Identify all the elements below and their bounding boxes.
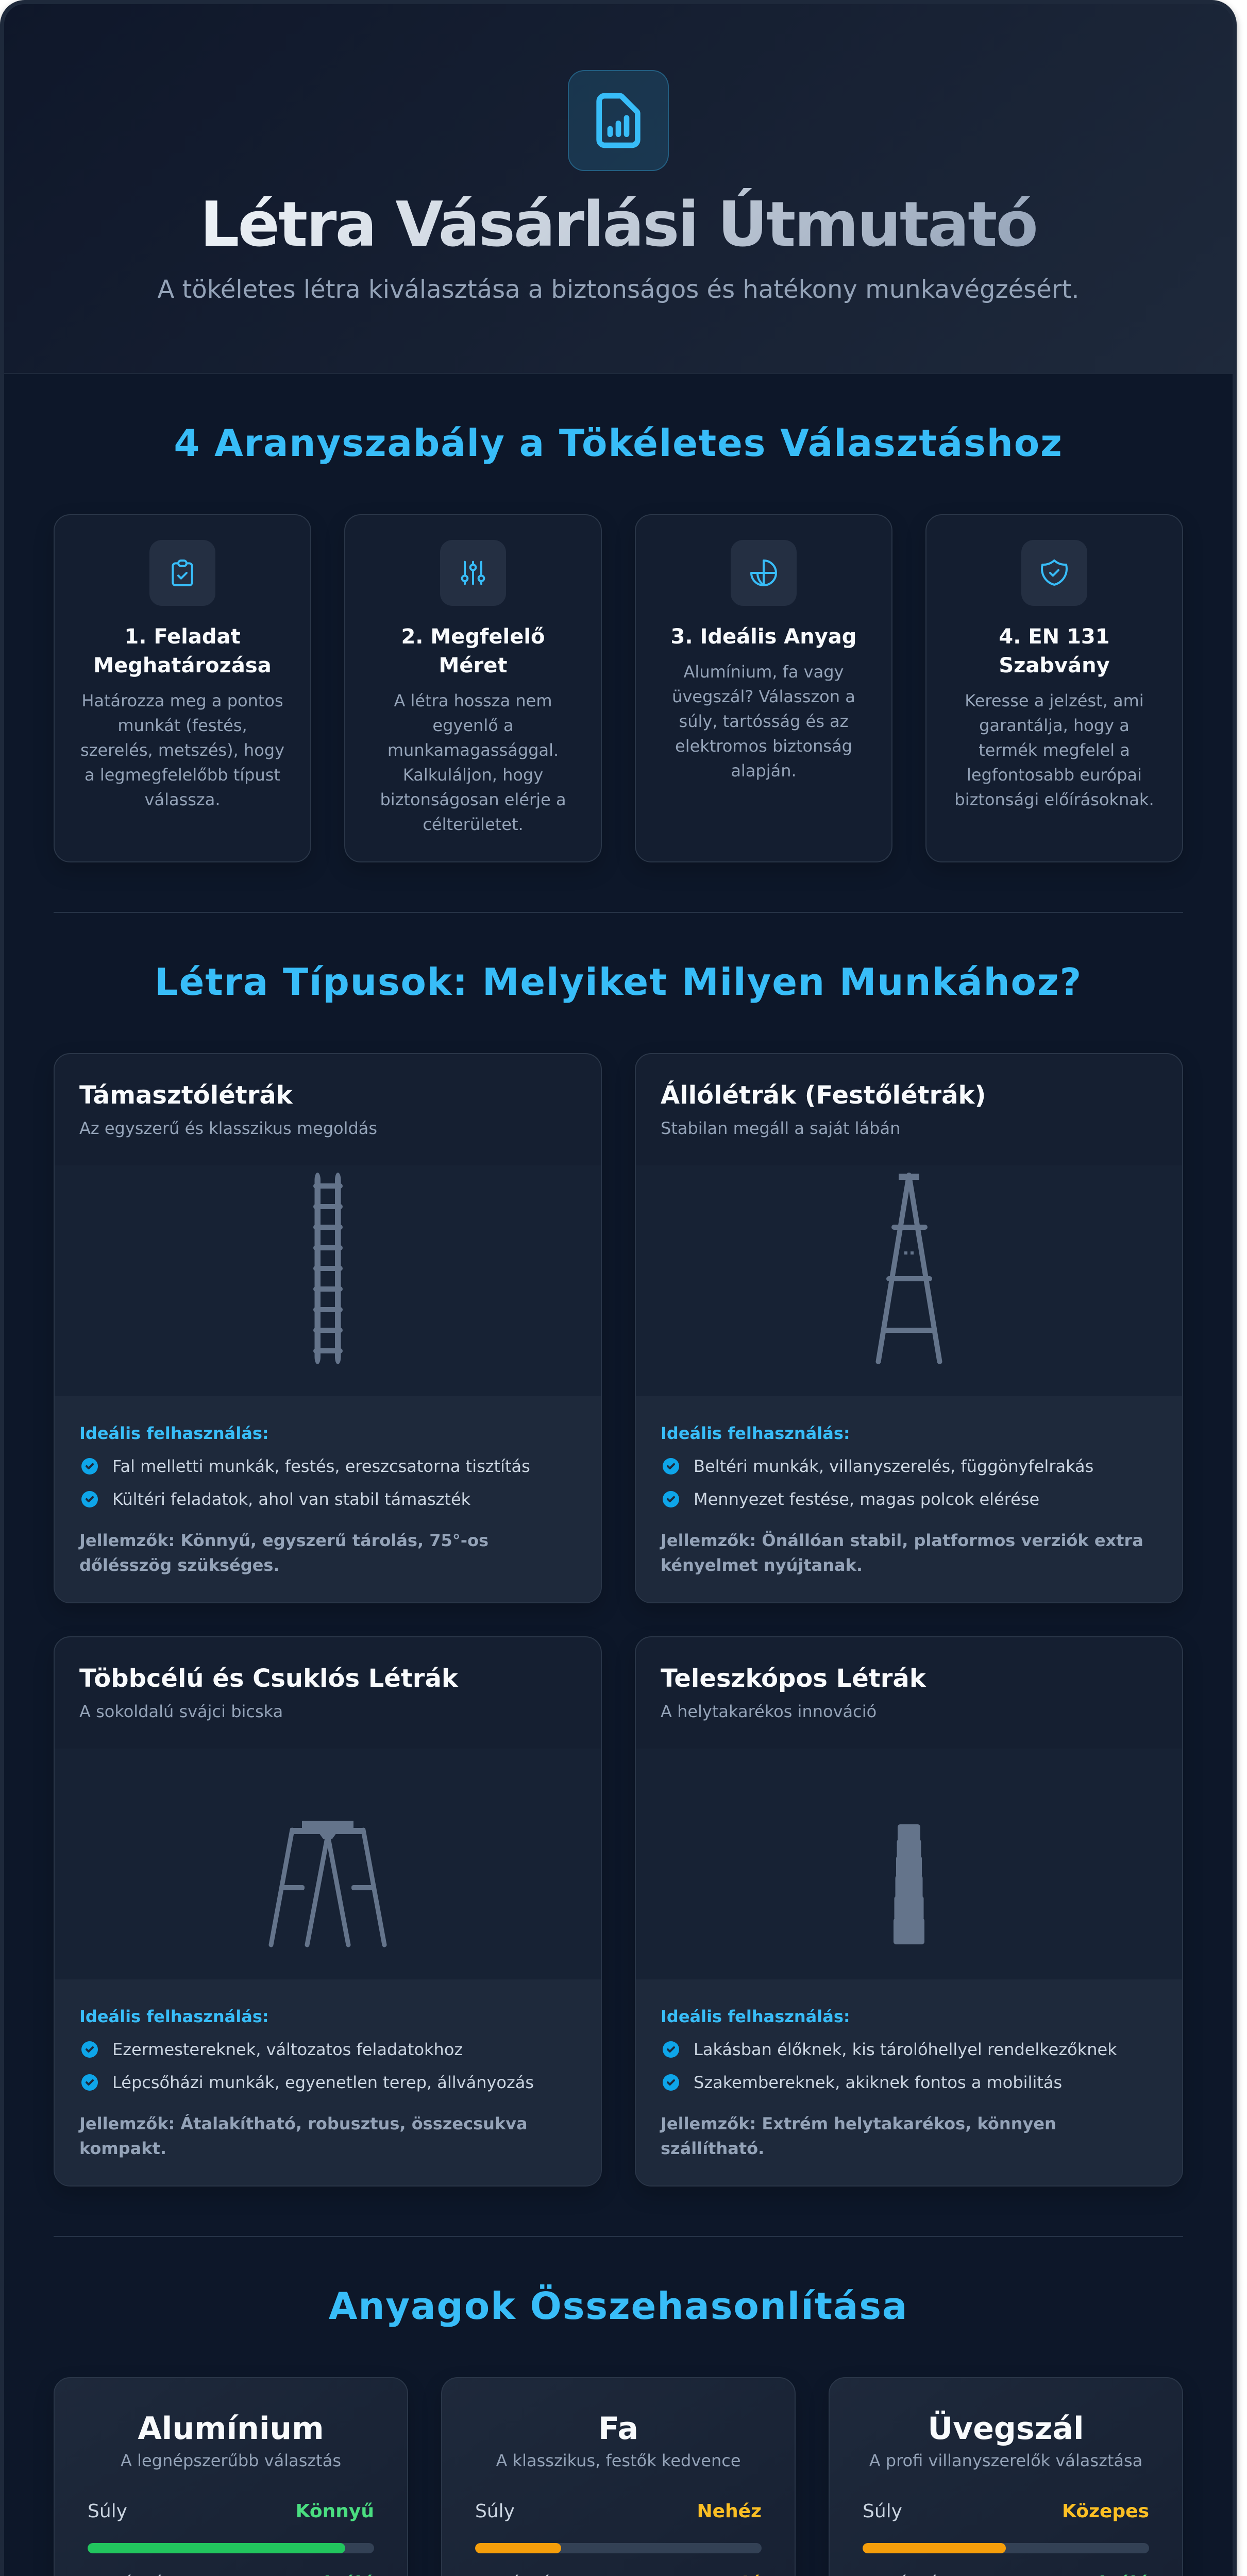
panel: telescopic ladders <box>635 1636 1183 2187</box>
multipurpose heading: Többcélú és Csuklós Létrák <box>79 1664 458 1693</box>
fiberglass subtitle: A profi villanyszerelők választása <box>869 2451 1142 2470</box>
heading: golden rules: 4 Aranyszabály a Tökéletes Választáshoz <box>174 421 1063 465</box>
bar: durability <box>863 2570 1149 2576</box>
telescopic heading <box>661 1664 926 1721</box>
bar: durability <box>88 2570 374 2576</box>
leaning ladder details: Ideális felhasználás: <box>79 1423 269 1443</box>
icon: document chart <box>568 70 669 171</box>
use case: Lépcsőházi munkák, egyenetlen terep, állványozás <box>112 2073 534 2092</box>
icon: sliders <box>440 540 506 606</box>
use case: Ezermestereknek, változatos feladatokhoz <box>112 2040 463 2059</box>
bar: weight <box>863 2498 1149 2570</box>
rule 1 text: a legmegfelelőbb típust <box>85 765 280 785</box>
rule 3 heading: 3. Ideális Anyag <box>671 625 856 649</box>
characteristics <box>660 1531 1143 1575</box>
step ladder details: Ideális felhasználás: <box>661 1423 850 1443</box>
title: Létra Vásárlási Útmutató <box>200 189 1037 261</box>
leaning ladder heading: Támasztólétrák <box>79 1081 293 1110</box>
fiberglass title: Üvegszál <box>928 2411 1084 2447</box>
telescopic heading: Teleszkópos Létrák <box>661 1664 926 1693</box>
characteristics: Jellemzők: Könnyű, egyszerű tárolás, 75°-os <box>79 1531 488 1550</box>
rule 4 text: termék megfelel a <box>979 740 1130 760</box>
characteristics: Jellemzők: Extrém helytakarékos, könnyen <box>661 2114 1056 2133</box>
wood subtitle: A klasszikus, festők kedvence <box>496 2451 741 2470</box>
characteristics: kényelmet nyújtanak. <box>661 1555 863 1575</box>
panel: step ladders <box>635 1053 1183 1603</box>
characteristics: dőlésszög szükséges. <box>79 1555 280 1575</box>
telescopic details <box>636 1979 1182 2187</box>
panel: wood <box>441 2377 796 2576</box>
rule 3 text: üvegszál? Válasszon a <box>672 687 855 706</box>
rule 2 text: biztonságosan elérje a <box>380 790 566 809</box>
bar: weight: Nehéz <box>697 2501 762 2522</box>
header <box>4 4 1233 374</box>
panel: rule 3 <box>635 514 892 862</box>
panel: multipurpose ladders <box>54 1636 602 2187</box>
illustration: A-frame ladder <box>636 1165 1182 1396</box>
panel: rule 1 <box>54 514 311 862</box>
bar: durability <box>475 2570 762 2576</box>
use case: Lakásban élőknek, kis tárolóhellyel rendelkezőknek <box>694 2040 1117 2059</box>
use case: Beltéri munkák, villanyszerelés, függönyfelrakás <box>694 1456 1093 1476</box>
step ladder details <box>636 1396 1182 1603</box>
panel: rule 4 <box>925 514 1183 862</box>
characteristics <box>78 1531 488 1575</box>
bar: weight: Könnyű <box>296 2501 374 2522</box>
rule 2 text: munkamagassággal. <box>387 740 559 760</box>
use case: Szakembereknek, akiknek fontos a mobilitás <box>694 2073 1062 2092</box>
leaning ladder heading <box>79 1081 377 1138</box>
bar: weight: Súly <box>88 2501 127 2522</box>
rule 1 text <box>80 691 284 809</box>
telescopic details: Ideális felhasználás: <box>661 2007 850 2026</box>
illustration: telescopic ladder <box>636 1749 1182 1979</box>
rule 2 heading: Méret <box>439 654 507 677</box>
bar: weight <box>475 2498 762 2570</box>
rule 1 heading: Meghatározása <box>93 654 272 677</box>
characteristics <box>661 2111 1157 2161</box>
rule 4 heading: 4. EN 131 <box>999 625 1110 649</box>
characteristics: Jellemzők: Önállóan stabil, platformos verziók extra <box>661 1531 1143 1550</box>
leaning ladder details <box>55 1396 601 1603</box>
rule 4 text: biztonsági előírásoknak. <box>954 790 1154 809</box>
rule 2 heading: 2. Megfelelő <box>401 625 545 649</box>
use case: Mennyezet festése, magas polcok elérése <box>694 1489 1039 1509</box>
rule 1 heading: 1. Feladat <box>124 625 241 649</box>
rule 2 text: egyenlő a <box>432 716 514 735</box>
rule 4 heading <box>999 625 1110 677</box>
rule 3 text: elektromos biztonság <box>675 736 852 756</box>
bar: weight: Súly <box>863 2501 902 2522</box>
heading: materials: Anyagok Összehasonlítása <box>329 2284 908 2328</box>
rule 2 text: Kalkuláljon, hogy <box>403 765 543 785</box>
rule 1 text: szerelés, metszés), hogy <box>80 740 284 760</box>
rule 3 text: alapján. <box>731 761 797 781</box>
telescopic heading: A helytakarékos innováció <box>661 1702 877 1721</box>
characteristics <box>78 2114 528 2158</box>
illustration: articulated ladder <box>55 1749 601 1979</box>
wood title: Fa <box>598 2411 638 2447</box>
subtitle: A tökéletes létra kiválasztása a biztonságos és hatékony munkavégzésért. <box>157 275 1080 304</box>
characteristics: szállítható. <box>661 2139 764 2158</box>
step ladder heading <box>661 1080 986 1138</box>
rule 4 text <box>954 691 1154 809</box>
multipurpose details: Ideális felhasználás: <box>79 2007 269 2026</box>
rule 4 heading: Szabvány <box>999 654 1110 677</box>
rule 1 heading <box>93 625 272 677</box>
step ladder heading: Stabilan megáll a saját lábán <box>661 1118 900 1138</box>
rule 4 text: Keresse a jelzést, ami <box>965 691 1144 710</box>
leaning ladder heading: Az egyszerű és klasszikus megoldás <box>79 1118 377 1138</box>
icon: shield check <box>1021 540 1087 606</box>
rule 2 text: célterületet. <box>423 815 524 834</box>
icon: clipboard check <box>149 540 215 606</box>
aluminium subtitle: A legnépszerűbb választás <box>121 2451 341 2470</box>
use case: Kültéri feladatok, ahol van stabil támaszték <box>112 1489 470 1509</box>
rule 2 heading <box>401 625 545 677</box>
bar: weight: Súly <box>475 2501 515 2522</box>
rule 3 text: Alumínium, fa vagy <box>684 662 844 682</box>
rule 1 text: Határozza meg a pontos <box>81 691 283 710</box>
illustration: straight ladder <box>55 1165 601 1396</box>
rule 4 text: legfontosabb európai <box>967 765 1142 785</box>
panel: aluminium <box>54 2377 408 2576</box>
rule 1 text: munkát (festés, <box>117 716 247 735</box>
rule 3 text <box>672 662 855 781</box>
bar: weight: Közepes <box>1062 2501 1149 2522</box>
multipurpose details <box>55 1979 601 2187</box>
rule 4 text: garantálja, hogy a <box>979 716 1130 735</box>
rule 1 text: válassza. <box>145 790 220 809</box>
characteristics: kompakt. <box>79 2139 166 2158</box>
step ladder heading: Állólétrák (Festőlétrák) <box>661 1081 986 1110</box>
panel: leaning ladders <box>54 1053 602 1603</box>
characteristics: Jellemzők: Átalakítható, robusztus, összecsukva <box>79 2114 528 2133</box>
panel: fiberglass <box>829 2377 1183 2576</box>
use case: Fal melletti munkák, festés, ereszcsatorna tisztítás <box>112 1456 530 1476</box>
heading: ladder types: Létra Típusok: Melyiket Milyen Munkához? <box>155 960 1082 1004</box>
multipurpose heading <box>79 1664 459 1721</box>
aluminium title: Alumínium <box>138 2411 324 2447</box>
rule 3 text: súly, tartósság és az <box>679 711 848 731</box>
rule 2 text: A létra hossza nem <box>394 691 552 710</box>
rule 2 text <box>380 691 566 834</box>
multipurpose heading: A sokoldalú svájci bicska <box>79 1702 283 1721</box>
icon: material pie <box>731 540 797 606</box>
panel: rule 2 <box>344 514 602 862</box>
bar: weight <box>88 2498 374 2570</box>
